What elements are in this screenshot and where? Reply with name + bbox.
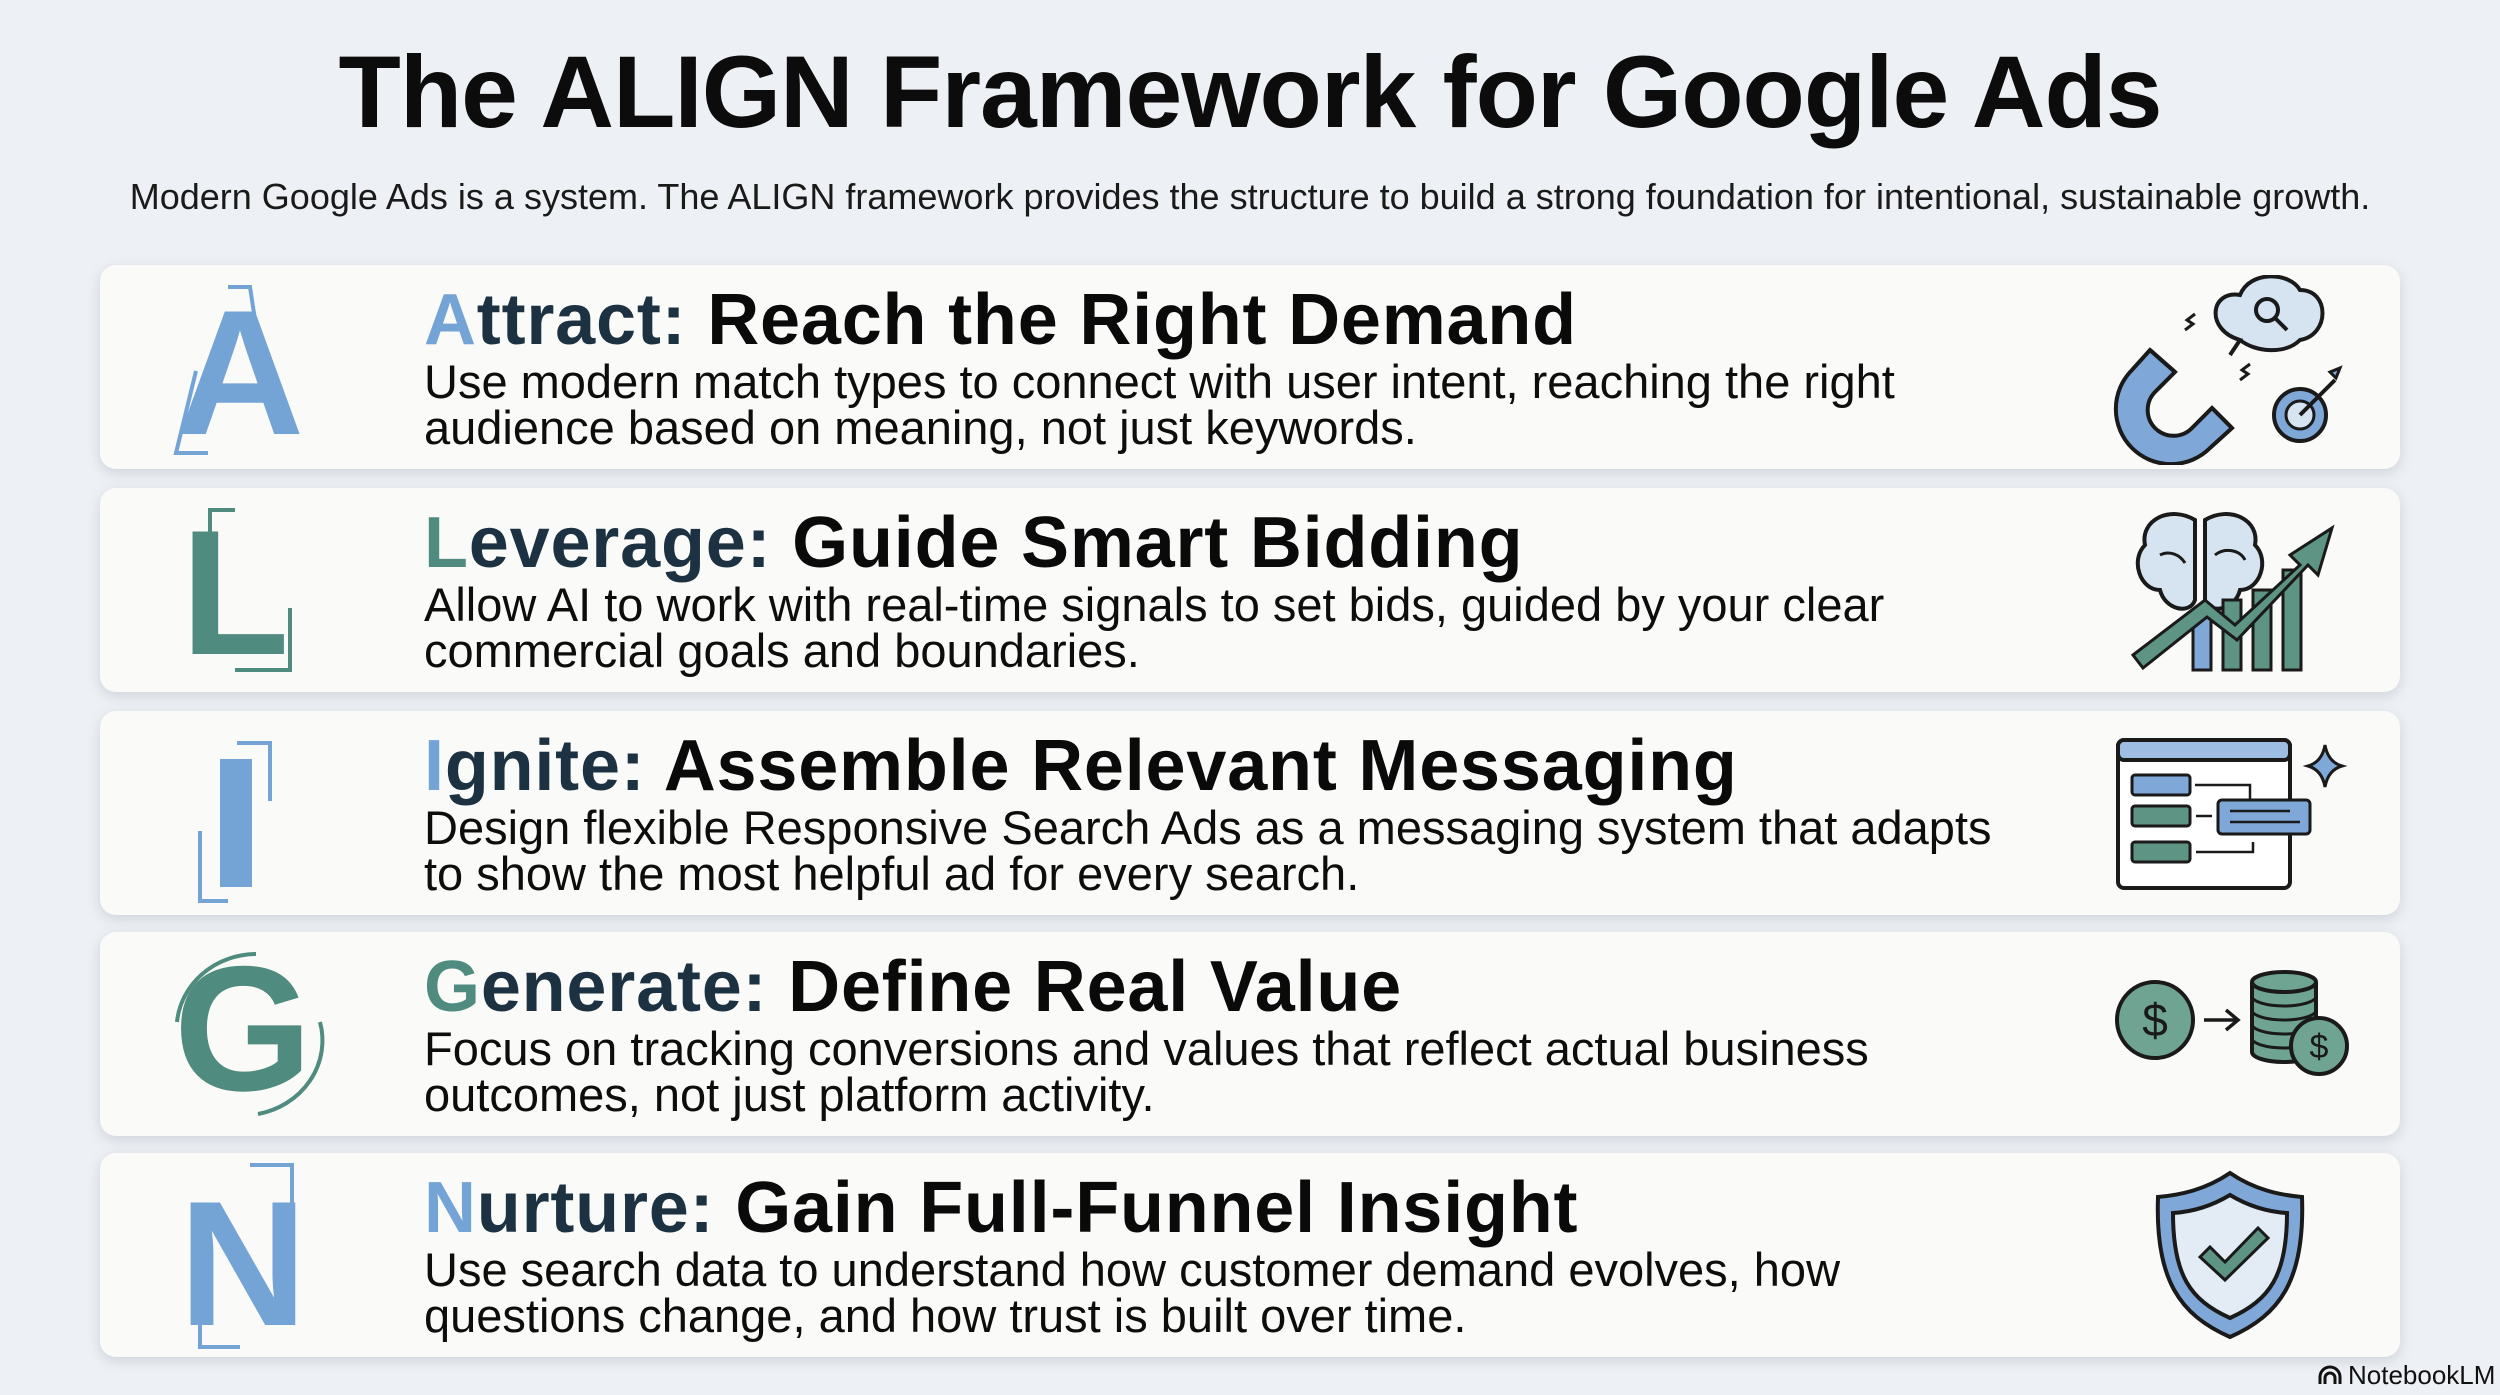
title: The ALIGN Framework for Google Ads <box>339 35 2161 149</box>
letter icon: I <box>198 741 272 903</box>
body text: Focus on tracking conversions and values that reflect actual business <box>424 1022 1869 1075</box>
icon: magnet, search cloud and target <box>2114 275 2343 465</box>
body text <box>424 355 1895 454</box>
icon: coin to stacked value <box>2115 970 2349 1076</box>
body text <box>424 801 1992 900</box>
body text <box>424 1022 1869 1121</box>
body text: commercial goals and boundaries. <box>424 624 1140 677</box>
panel: nurture <box>100 1153 2400 1357</box>
icon: coin to stacked value: $ <box>2142 994 2168 1046</box>
body text: audience based on meaning, not just keywords. <box>424 401 1417 454</box>
icon: coin to stacked value: $ <box>2310 1028 2329 1066</box>
panel: leverage <box>100 488 2400 692</box>
heading: Leverage: Guide Smart Bidding <box>424 503 1523 583</box>
heading: Generate: Define Real Value <box>424 947 1402 1027</box>
body text: Use modern match types to connect with user intent, reaching the right <box>424 355 1895 408</box>
heading: Nurture: Gain Full-Funnel Insight <box>424 1168 1578 1248</box>
heading: Ignite: Assemble Relevant Messaging <box>424 726 1738 806</box>
panel: ignite <box>100 711 2400 915</box>
body text: outcomes, not just platform activity. <box>424 1068 1155 1121</box>
body text: Allow AI to work with real-time signals to set bids, guided by your clear <box>424 578 1884 631</box>
footer: NotebookLM logo: NotebookLM <box>2348 1360 2495 1390</box>
icon: ad builder window <box>2116 738 2348 890</box>
body text: questions change, and how trust is built over time. <box>424 1289 1466 1342</box>
body text: to show the most helpful ad for every search. <box>424 847 1359 900</box>
panel: attract <box>100 265 2400 469</box>
body text: Use search data to understand how customer demand evolves, how <box>424 1243 1840 1296</box>
subtitle: Modern Google Ads is a system. The ALIGN framework provides the structure to build a strong foundation for intentional, sustainable growth. <box>130 176 2370 217</box>
body text <box>424 1243 1840 1342</box>
body text <box>424 578 1884 677</box>
panel: generate <box>100 932 2400 1136</box>
body text: Design flexible Responsive Search Ads as a messaging system that adapts <box>424 801 1992 854</box>
heading: Attract: Reach the Right Demand <box>424 280 1577 360</box>
icon: brain with growth arrow <box>2131 512 2334 672</box>
icon: shield with check <box>2156 1170 2304 1340</box>
